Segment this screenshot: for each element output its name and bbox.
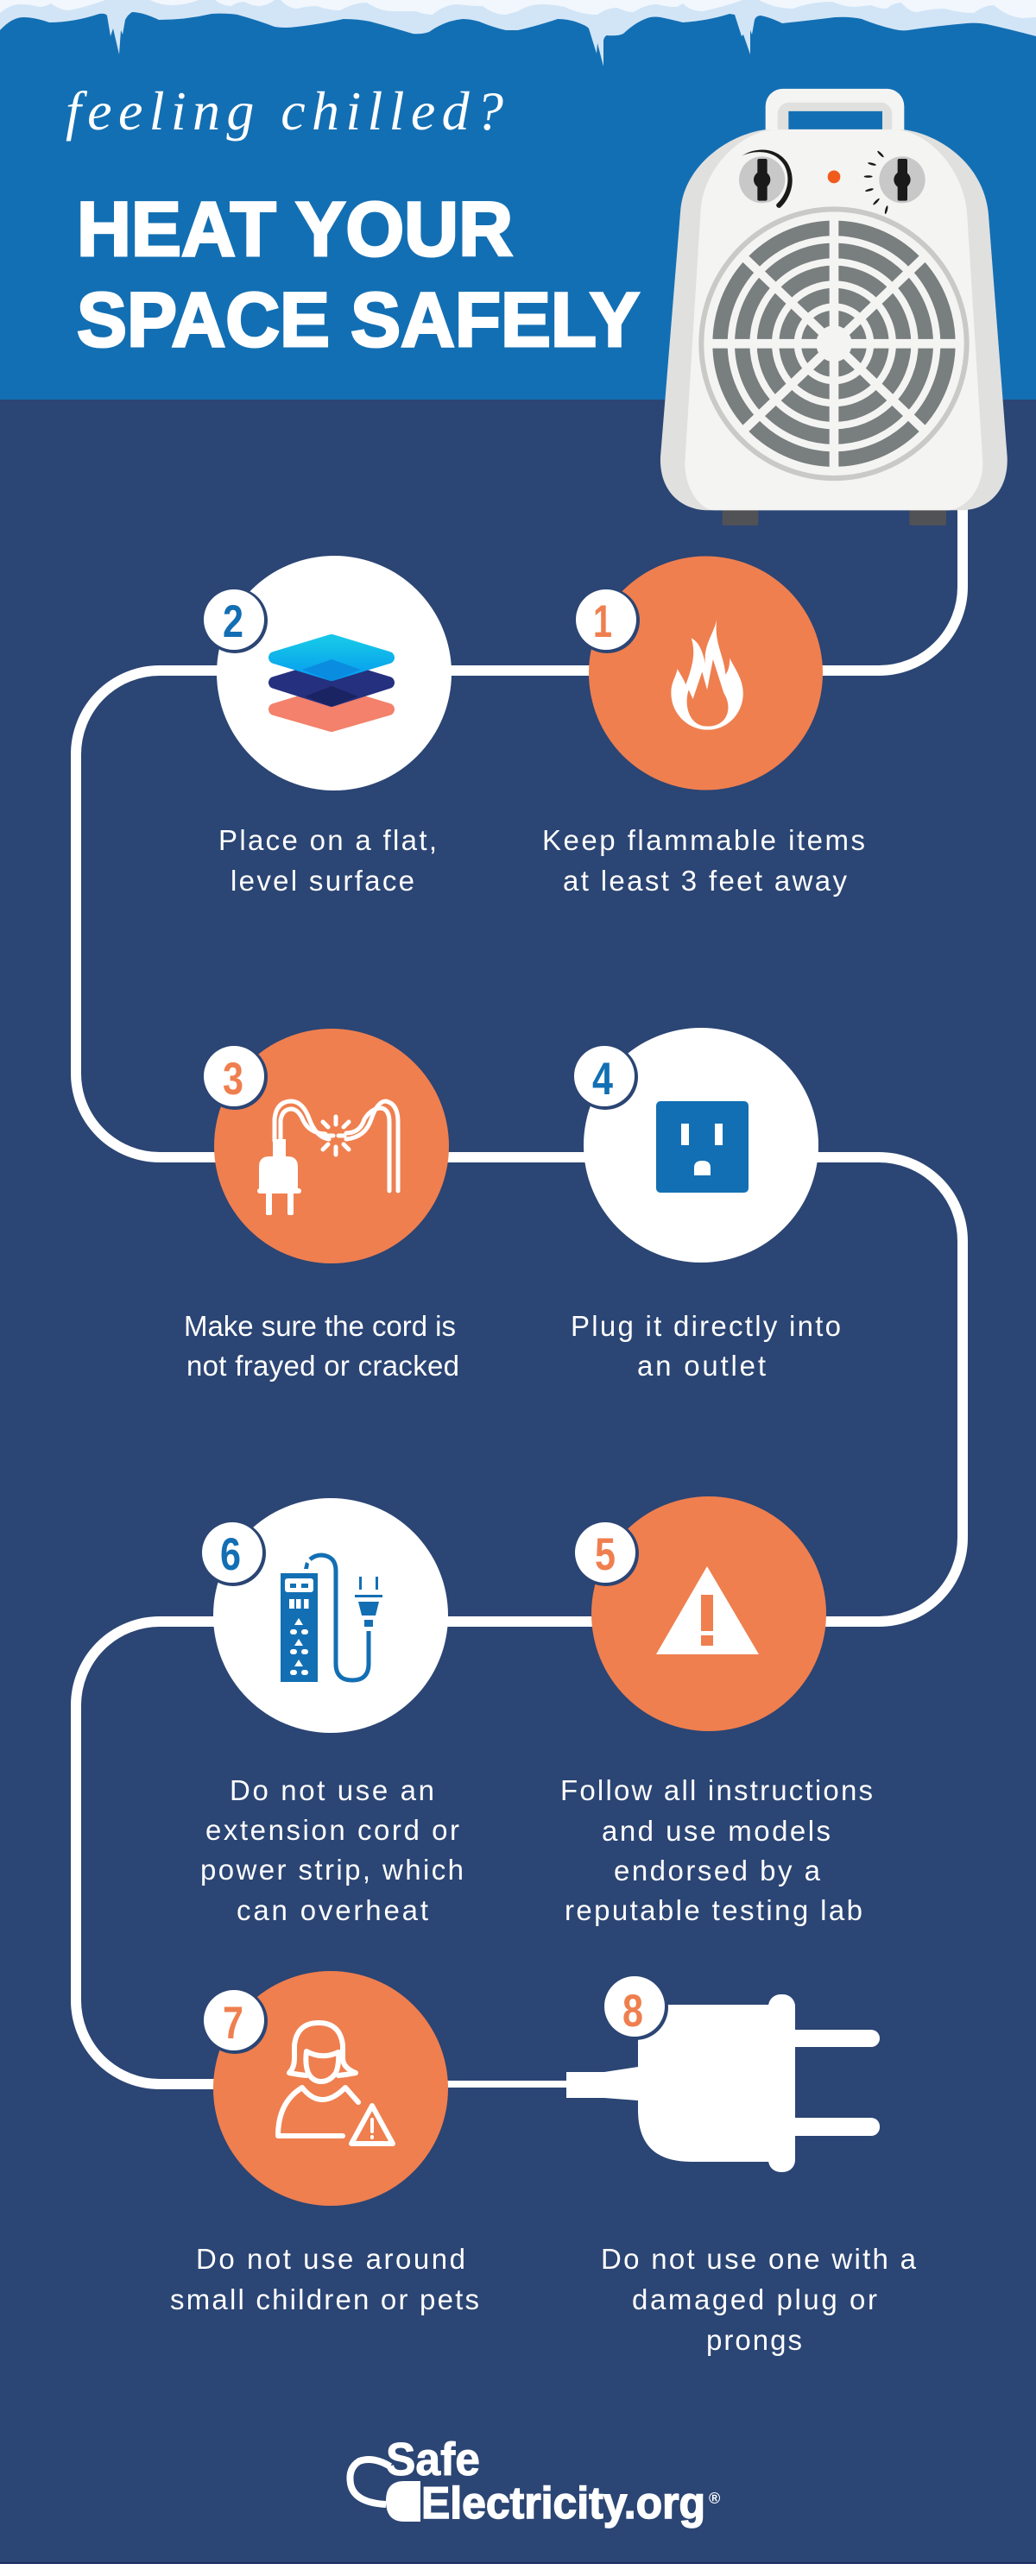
badge: number 4 [572,1044,638,1110]
text: step 3 caption [184,1310,459,1382]
step 2: flat level surface [202,556,452,897]
text: step 8 caption: damaged plug or [632,2283,877,2315]
badge: number 6: 6 [220,1529,241,1580]
text: step 4 caption: an outlet [637,1350,766,1382]
text: step 6 caption [200,1774,464,1926]
text: step 8 caption [601,2243,917,2356]
circle: step 5 [591,1496,826,1731]
text: step 6 caption: power strip, which [200,1854,464,1886]
circle: step 2 [217,556,452,790]
step 3: cord check [184,1029,459,1382]
panel: blue header [0,0,1036,400]
badge: number 5 [573,1521,639,1586]
icon: warning triangle [656,1566,759,1654]
text: step 8 caption: prongs [706,2324,802,2356]
text: step 7 caption: Do not use around [196,2243,465,2275]
badge: number 1 [574,588,640,653]
heater feet [723,507,946,526]
text: step 2 caption: Place on a flat, [218,824,437,856]
step 4: wall outlet [571,1028,841,1382]
step 7: children and pets [170,1971,479,2315]
icon: power strip and plug [281,1555,382,1682]
text: step 7 caption [170,2243,479,2315]
illustration: space heater [660,89,1008,526]
step 1: keep flammable items away [542,556,865,897]
text: step 6 caption: extension cord or [205,1814,459,1846]
icon: stacked layers [275,640,388,726]
circle: step 1 [589,556,823,790]
badge: number 4: 4 [592,1054,613,1105]
badge: number 2 [202,588,268,653]
text: step 7 caption: small children or pets [170,2283,479,2315]
text: step 6 caption: Do not use an [230,1774,434,1806]
circle: step 6 [213,1498,448,1733]
title: SPACE SAFELY [77,276,640,362]
text: step 5 caption: reputable testing lab [565,1894,862,1926]
title: HEAT YOUR [77,186,513,272]
text: step 2 caption [218,824,437,897]
step 5: follow instructions [560,1496,873,1926]
badge: number 7 [202,1988,268,2054]
badge: number 8 [603,1975,668,2040]
text: step 3 caption: Make sure the cord is [184,1310,456,1342]
circle: step 7 [213,1971,448,2206]
badge: number 2: 2 [223,596,243,647]
text: step 4 caption: Plug it directly into [571,1310,841,1342]
logo: SafeElectricity.org: Electricity.org [421,2478,705,2529]
heater knobs and indicator [739,150,925,214]
text: step 5 caption: endorsed by a [614,1855,821,1886]
step 8: damaged plug [566,1975,917,2356]
badge: number 8: 8 [622,1986,643,2037]
logo: SafeElectricity.org: Safe [386,2434,480,2485]
heater handle [766,89,904,147]
logo: SafeElectricity.org [350,2434,720,2529]
step 6: no extension cords [200,1498,464,1926]
text: step 5 caption: Follow all instructions [560,1774,873,1806]
connector: power cord path [76,483,963,2084]
text: step 1 caption: Keep flammable items [542,824,865,856]
text: step 1 caption: at least 3 feet away [563,865,848,897]
icicles: pale ice edge [0,0,1036,66]
text: step 6 caption: can overheat [237,1894,428,1926]
logo: SafeElectricity.org: ® [709,2490,720,2507]
heater body [660,129,1008,510]
icon: person with warning [278,2023,393,2144]
badge: number 1: 1 [593,596,612,647]
circle: step 4 [584,1028,818,1263]
badge: number 7: 7 [223,1998,243,2049]
text: step 5 caption: and use models [602,1815,831,1847]
snow: white top edge [0,0,1036,18]
icon: wall outlet [656,1101,749,1193]
heater grille [698,206,970,481]
title [77,186,640,362]
text: step 1 caption [542,824,865,897]
circle: step 3 [214,1029,449,1263]
text: step 8 caption: Do not use one with a [601,2243,917,2275]
text: step 2 caption: level surface [231,865,414,897]
text: step 3 caption: not frayed or cracked [186,1350,459,1382]
text: step 4 caption [571,1310,841,1382]
badge: number 3: 3 [223,1054,243,1105]
icon: frayed cord and plug [257,1101,398,1215]
badge: number 5: 5 [595,1529,616,1580]
badge: number 6 [200,1521,266,1586]
footer edge line [0,2562,1036,2564]
icon: flame [671,617,743,730]
script tagline: feeling chilled? [66,80,503,142]
text: step 5 caption [560,1774,873,1926]
icon: large plug [566,1994,880,2172]
badge: number 3 [202,1044,268,1110]
